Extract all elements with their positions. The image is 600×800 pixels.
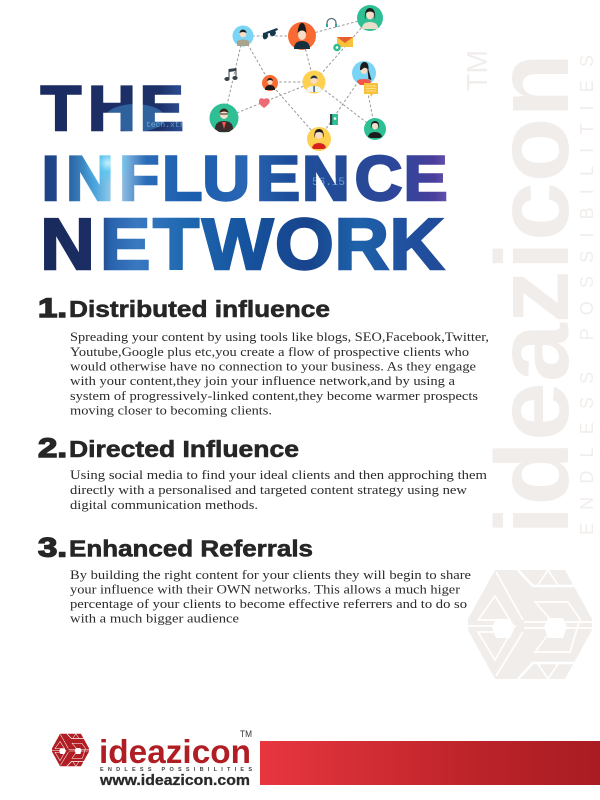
footer [52,729,600,789]
person: green top node [357,5,383,31]
person: light blue node [232,26,254,46]
footer logo mark [52,734,89,766]
body 3: percentage of your clients to become effective referrers and to do so [70,596,467,611]
icon: mail [337,37,353,47]
title line: NETWORK: NETWORK [40,203,444,284]
body 3: your influence with their OWN networks. This allows a much higer [70,582,461,596]
icon: music notes [224,68,238,81]
icon: headphones [327,18,336,27]
number 2: 2. [38,433,67,463]
section 3: enhanced referrals [38,532,471,626]
person: light blue woman node [352,61,376,85]
body 1: Youtube,Google plus etc,you create a flow of prospective clients who [70,344,469,359]
title line: THE: THE [41,73,184,143]
footer wordmark: ideazicon [99,733,251,770]
person: yellow centre node [302,70,326,94]
body 1: with your content,they join your influence network,and by using a [70,373,455,388]
icon: gear [333,44,341,51]
watermark trademark: TM [462,50,494,91]
body 3: with a much bigger audience [70,610,239,626]
person: small orange node [262,75,278,91]
watermark logo [468,570,592,679]
icon: sunglasses [263,28,278,39]
watermark tagline: ENDLESS POSSIBILITIES [577,55,597,535]
body 2: directly with a personalised and targeted content strategy using new [70,482,468,497]
title line: INFLUENCE: INFLUENCE [41,143,448,213]
heading 3: Enhanced Referrals [69,536,313,562]
body 1: system of progressively-linked content,they become warmer prospects [70,388,478,403]
watermark wordmark: ideazicon [475,53,591,535]
footer trademark: TM [240,729,252,739]
body 1: Spreading your content by using tools like blogs, SEO,Facebook,Twitter, [70,329,489,344]
body 3: By building the right content for your clients they will begin to share [70,567,471,582]
title [40,73,448,284]
footer red bar [260,741,600,785]
heading 1: Distributed influence [69,296,330,322]
body 2 [70,467,487,512]
watermark: vertical ideazicon brand [462,50,597,679]
section 2: directed influence [38,433,487,512]
network illustration [210,5,386,151]
body 3 [70,567,471,626]
icon: heart [259,98,270,108]
icon: contact book [330,114,338,125]
person: yellow bottom node [307,127,331,151]
section 1: distributed influence [38,293,489,418]
body 2: Using social media to find your ideal clients and then approching them [70,467,487,482]
number 1: 1. [38,293,67,323]
number 3: 3. [38,532,67,562]
body 1: moving closer to becoming clients. [70,402,272,418]
heading 2: Directed Influence [69,436,299,462]
body 1 [70,329,489,418]
body 2: digital communication methods. [70,497,258,512]
footer url: www.ideazicon.com [99,772,250,789]
icon: chat bubble [364,83,378,97]
person: orange node [288,22,316,50]
body 1: would otherwise have no connection to your business. As they engage [70,358,476,374]
network connections [224,18,375,139]
person: green bottom node [364,118,386,140]
footer tagline: ENDLESS POSSIBILITIES [100,767,252,773]
person: green man with glasses [210,104,238,132]
